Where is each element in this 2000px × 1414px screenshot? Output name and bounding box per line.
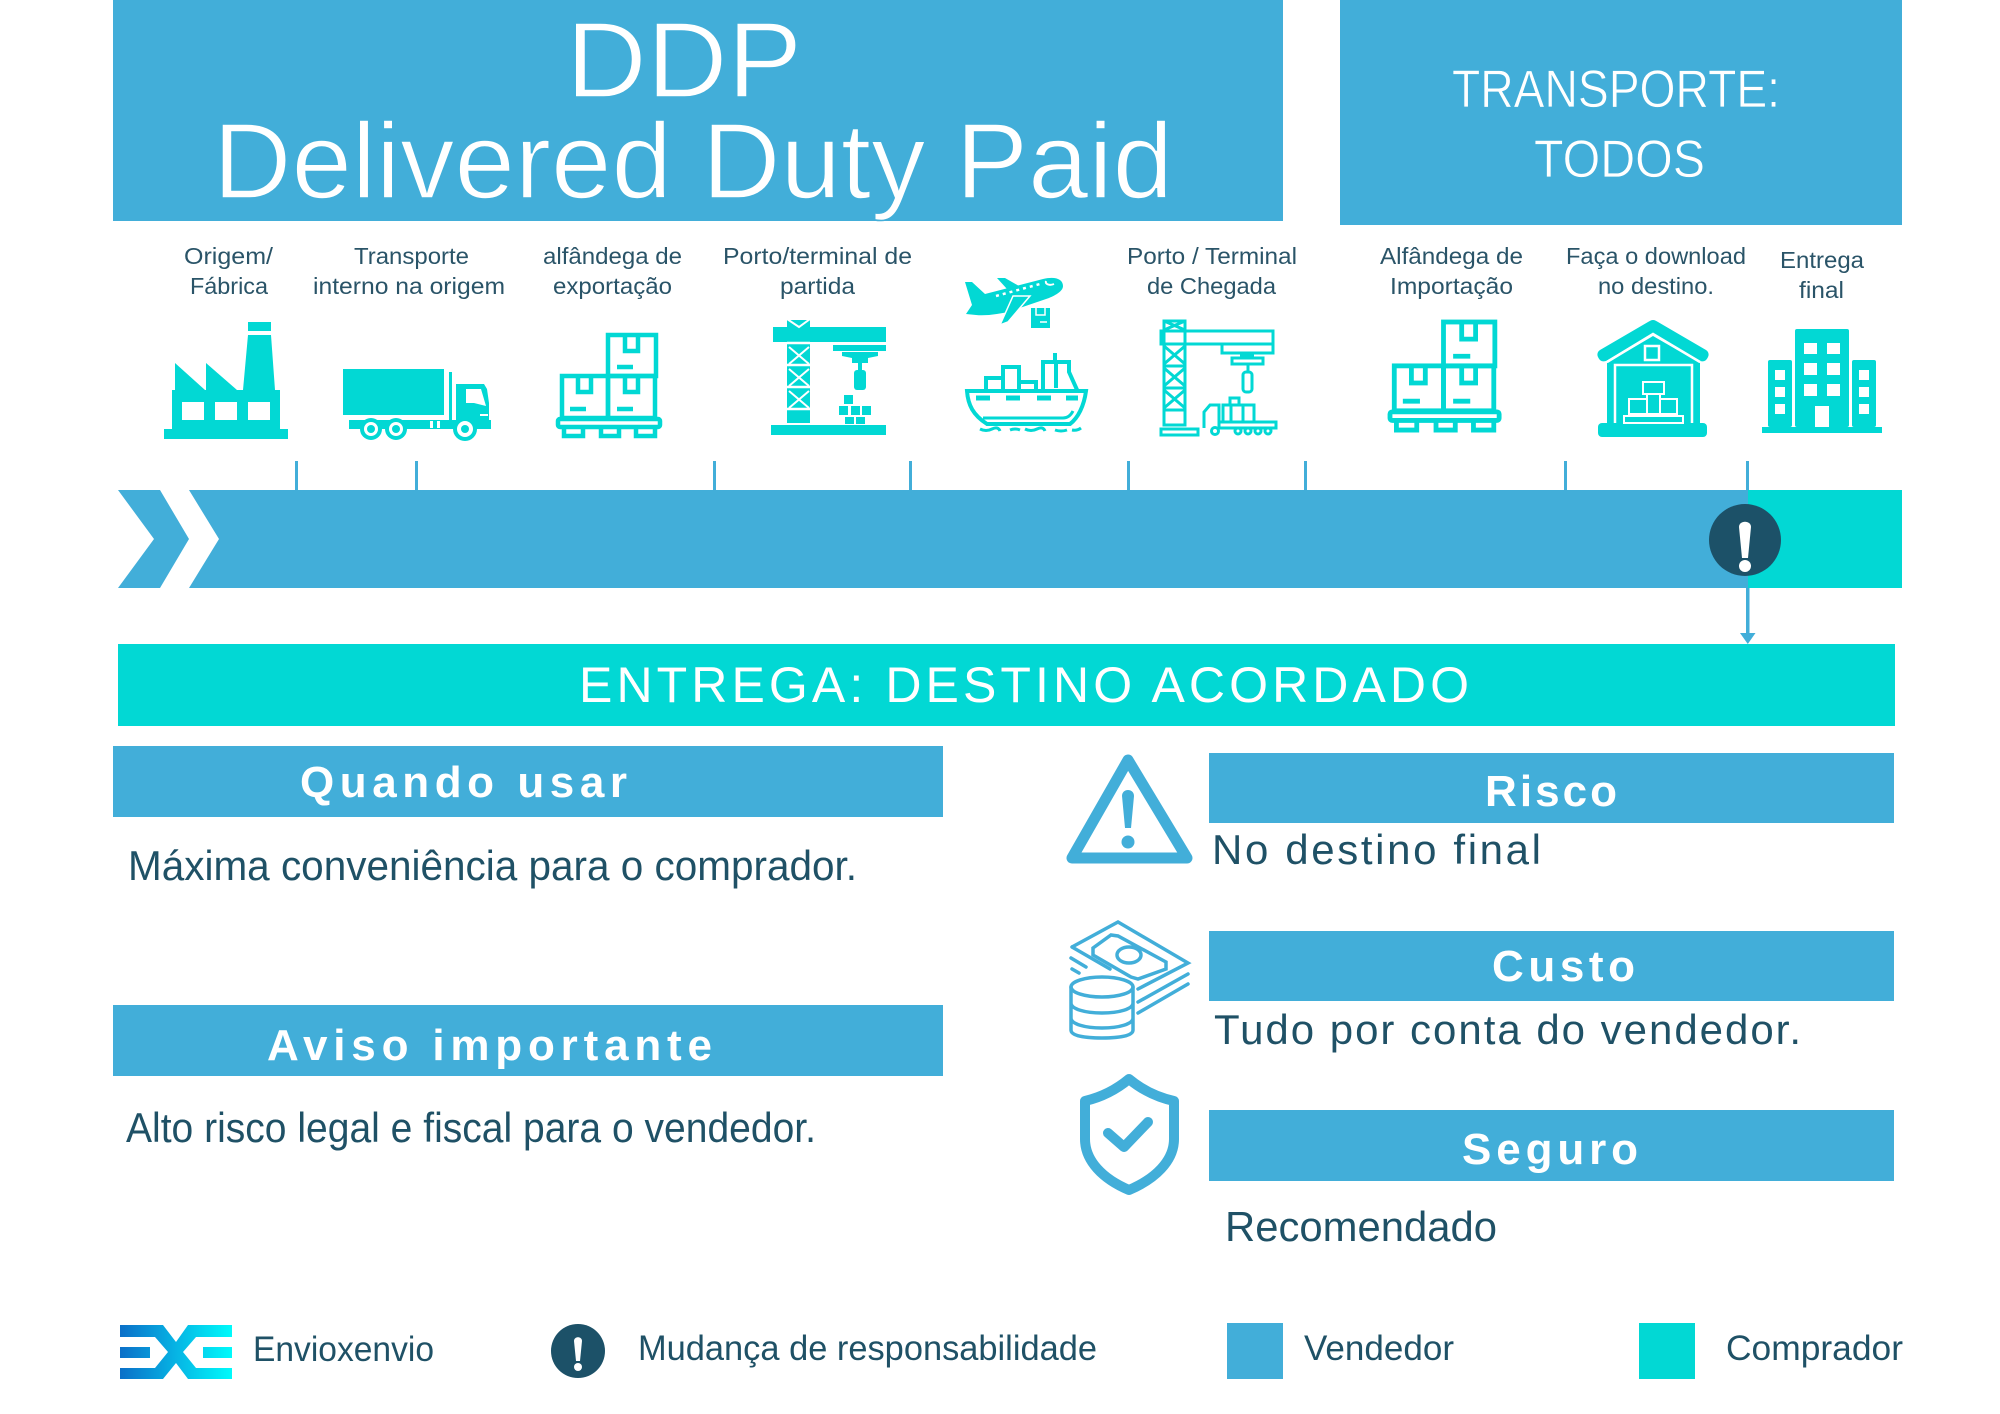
icon: solid crane — [771, 319, 886, 435]
icon: shield check — [1085, 1079, 1174, 1190]
icon: plane and parcel — [965, 278, 1063, 328]
delivery heading: ENTREGA: DESTINO ACORDADO — [579, 657, 1469, 713]
step labels: Importação — [1390, 273, 1513, 299]
heading: Quando usar — [300, 758, 627, 807]
title panel — [113, 0, 1283, 221]
heading: Risco — [1485, 767, 1617, 816]
panel: custo — [1209, 931, 1894, 1053]
legend: change of responsibility icon — [551, 1324, 605, 1378]
timeline ticks — [295, 461, 1749, 490]
icon: outline crane — [1161, 321, 1276, 435]
step labels: Alfândega de — [1380, 243, 1523, 269]
body text: Máxima conveniência para o comprador. — [128, 842, 857, 889]
title: Delivered Duty Paid: Delivered Duty Paid — [213, 100, 1173, 221]
step labels: exportação — [553, 273, 672, 299]
panel: aviso importante — [113, 1005, 943, 1151]
step labels: partida — [780, 273, 855, 299]
step labels — [184, 243, 1864, 303]
legend: buyer: Comprador — [1726, 1329, 1903, 1368]
icon: warning triangle — [1072, 760, 1187, 858]
delivery banner — [118, 644, 1895, 726]
icon: warehouse — [1597, 320, 1709, 437]
panel: risco — [1209, 753, 1894, 873]
body text: Recomendado — [1225, 1203, 1497, 1250]
transport label line 2: TODOS — [1534, 130, 1705, 189]
step labels: Porto / Terminal — [1127, 243, 1297, 269]
step labels: Origem/ — [184, 243, 274, 269]
legend: buyer — [1639, 1323, 1903, 1379]
icon: pallet boxes export — [558, 335, 660, 436]
step labels: de Chegada — [1147, 273, 1276, 299]
body text: Alto risco legal e fiscal para o vendedor. — [126, 1104, 816, 1151]
step labels: Entrega — [1780, 247, 1864, 273]
step labels: final — [1799, 277, 1844, 303]
step labels: Fábrica — [190, 273, 268, 299]
step labels: interno na origem — [313, 273, 505, 299]
panel: quando usar — [113, 746, 943, 889]
step labels: Transporte — [354, 243, 469, 269]
icon: buildings — [1762, 329, 1882, 433]
timeline bar — [118, 490, 1902, 588]
panel: seguro — [1209, 1110, 1894, 1250]
step labels: alfândega de — [543, 243, 682, 269]
step labels: Faça o download — [1566, 243, 1746, 269]
icon: ship — [967, 353, 1086, 431]
body text: Tudo por conta do vendedor. — [1214, 1006, 1801, 1053]
legend: brand name: Envioxenvio — [253, 1330, 434, 1369]
icon: pallet boxes import — [1390, 322, 1499, 430]
icon: money and coins — [1071, 922, 1188, 1038]
title: DDP: DDP — [566, 0, 802, 120]
legend: change of responsibility label: Mudança de responsabilidade — [638, 1329, 1097, 1368]
transport panel — [1340, 0, 1902, 225]
arrow to delivery — [1740, 588, 1756, 644]
transfer marker — [1709, 504, 1781, 576]
logo — [120, 1325, 232, 1379]
icon: factory — [164, 322, 288, 439]
step labels: no destino. — [1598, 273, 1714, 299]
heading: Aviso importante — [267, 1021, 712, 1070]
legend: seller: Vendedor — [1304, 1329, 1454, 1368]
icon: truck — [343, 369, 491, 441]
transport label line 1: TRANSPORTE: — [1452, 60, 1780, 119]
legend: seller — [1227, 1323, 1454, 1379]
heading: Seguro — [1462, 1125, 1638, 1174]
heading: Custo — [1492, 942, 1635, 991]
step labels: Porto/terminal de — [723, 243, 912, 269]
body text: No destino final — [1212, 826, 1541, 873]
